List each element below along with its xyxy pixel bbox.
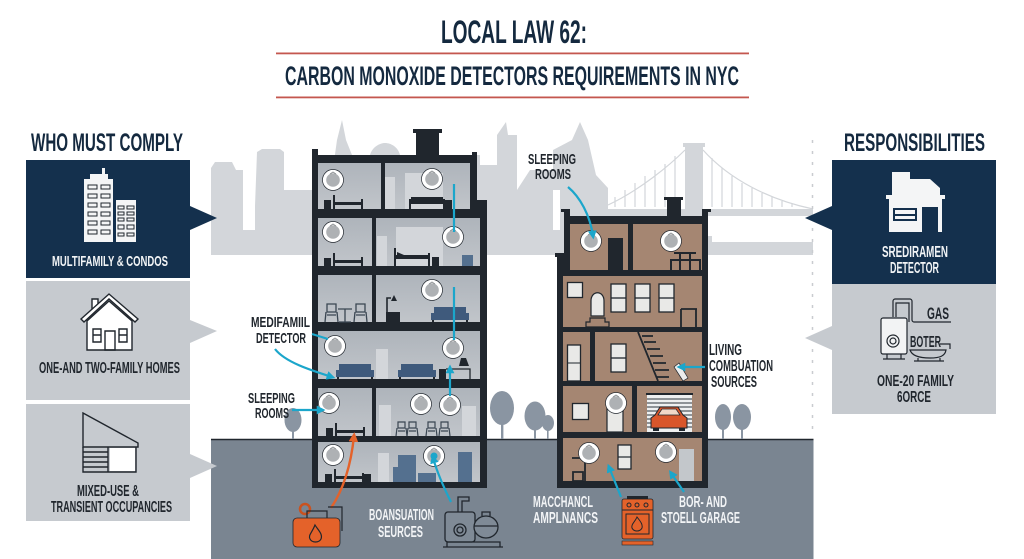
label: one-20 family	[877, 373, 954, 406]
label: mechanical appliances	[533, 494, 598, 527]
detectors	[578, 230, 682, 464]
title: LOCAL LAW 62:	[441, 14, 587, 50]
label: combustion sources	[369, 507, 434, 541]
label: sleeping rooms left	[248, 390, 295, 422]
chimney	[664, 197, 683, 216]
label: transient occupancies: TRANSIENT OCCUPANCIES	[51, 499, 172, 516]
dark door	[608, 238, 623, 270]
panel: one and two family homes	[26, 281, 217, 400]
icon: boiler pump	[443, 497, 503, 547]
panel: multifamily and condos	[26, 160, 217, 278]
label: boiler and garage: STOELL GARAGE	[661, 510, 740, 527]
label: sleeping rooms right: SLEEPING	[528, 151, 576, 168]
label: mechanical appliances: MACCHANCL	[533, 494, 593, 511]
label: living combustion sources: COMBUATION	[709, 358, 773, 375]
icon: orange furnace	[293, 436, 354, 547]
label: boiler and garage: BOR- AND	[679, 494, 727, 511]
ground	[211, 439, 814, 559]
garage door and car	[646, 393, 693, 432]
icon: apartment towers	[84, 168, 136, 242]
furniture	[324, 195, 473, 483]
label: combustion sources: SEURCES	[378, 524, 423, 541]
label: living combustion sources	[709, 342, 773, 391]
icon: garage shed	[83, 413, 138, 472]
label: sleeping rooms right: ROOMS	[535, 166, 571, 183]
windows and doors	[567, 282, 697, 481]
label: boiler and garage	[661, 494, 740, 527]
label: multifamily: MULTIFAMILY & CONDOS	[52, 253, 168, 270]
right building	[555, 197, 711, 488]
panel: detector responsibility	[805, 160, 996, 284]
label: sleeping rooms left: ROOMS	[255, 405, 289, 422]
label: mixed-use: MIXED-USE &	[77, 483, 139, 500]
icon: orange stove	[622, 496, 653, 545]
label: gas: GAS	[927, 305, 949, 323]
callout arrows: left building	[275, 184, 454, 502]
rooms	[318, 163, 480, 482]
label: boter: BOTER	[910, 334, 941, 351]
panel: mixed-use and transient	[26, 404, 217, 521]
stairs	[638, 332, 669, 381]
left building	[312, 129, 487, 488]
label: living combustion sources: LIVING	[709, 342, 742, 359]
label: medifamil detector: DETECTOR	[256, 330, 306, 347]
background skyline	[211, 120, 813, 255]
heading: who must comply: WHO MUST COMPLY	[31, 129, 183, 157]
label: medifamil detector: MEDIFAMIIL	[251, 314, 310, 331]
label: one-20 family: 6ORCE	[897, 389, 931, 406]
basement storage blocks	[393, 452, 472, 482]
brown rooms	[563, 224, 702, 481]
icon: house	[81, 294, 138, 350]
building frame	[555, 209, 711, 488]
label: sprediramen detector: SREDIRAMEN	[882, 244, 948, 261]
label: one-20 family: ONE-20 FAMILY	[877, 373, 954, 390]
chimney	[413, 129, 442, 158]
CO alarm device	[674, 363, 688, 381]
detectors	[318, 168, 464, 466]
callout arrows: right building	[568, 187, 705, 497]
label: sleeping rooms right	[528, 151, 576, 183]
icon: gas boiler	[881, 299, 951, 361]
label: mechanical appliances: AMPLNANCS	[533, 510, 598, 527]
label: homes: ONE-AND TWO-FAMILY HOMES	[39, 360, 180, 377]
label: sleeping rooms left: SLEEPING	[248, 390, 295, 407]
label: sprediramen detector: DETECTOR	[890, 260, 939, 277]
label: living combustion sources: SOURCES	[711, 374, 757, 391]
icon: building	[886, 172, 945, 232]
panel: gas boiler responsibility	[805, 284, 996, 414]
label: medifamil detector	[251, 314, 310, 347]
trees	[284, 391, 751, 439]
table	[670, 253, 701, 270]
label: sprediramen detector	[882, 244, 948, 277]
label: combustion sources: BOANSUATION	[369, 507, 434, 524]
building frame	[312, 149, 487, 488]
